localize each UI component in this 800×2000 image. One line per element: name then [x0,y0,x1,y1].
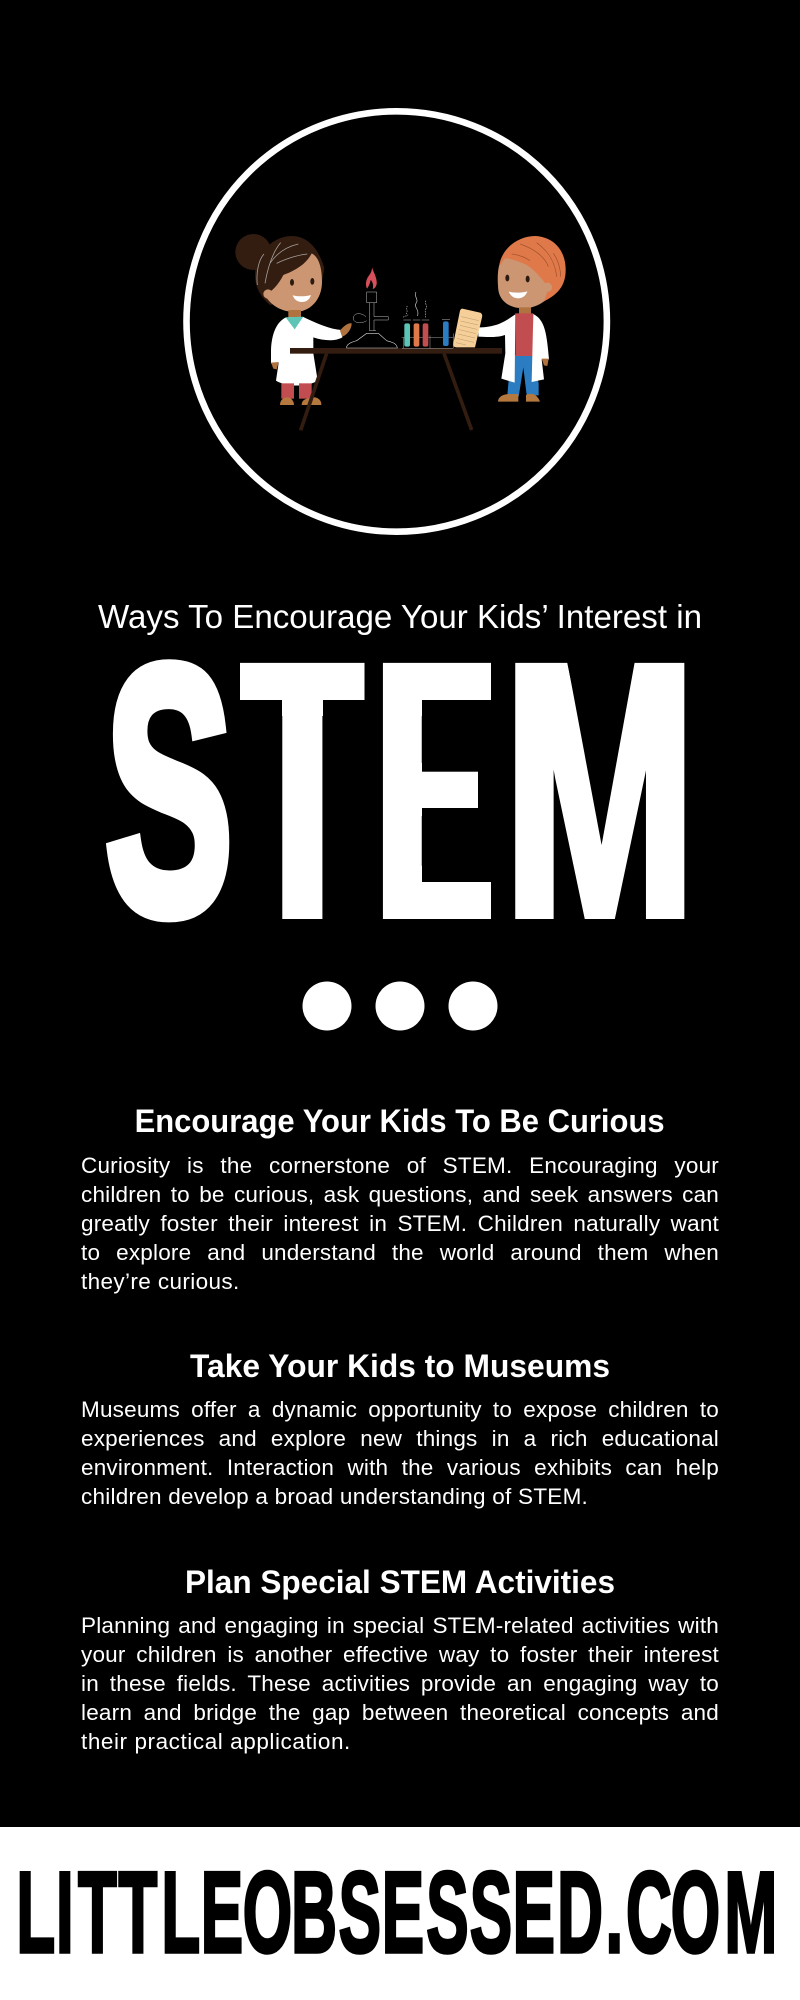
test tubes and rack [402,292,453,349]
paragraph: museums [81,1397,719,1508]
paragraph: activities: your children is another effective way to foster their interest [81,1642,719,1667]
paragraph: activities: their practical application. [81,1729,351,1754]
bunsen burner with flame [347,267,397,348]
table [290,348,502,430]
footer website text: LITTLEOBSESSED.COM [16,1848,777,1977]
paragraph: curious: Curiosity is the cornerstone of STEM. Encouraging your [81,1153,719,1178]
paragraph: curious: to explore and understand the world around them when [81,1240,719,1265]
footer band [0,1827,800,2000]
girl scientist [235,234,352,405]
illustration: kids at lab table [235,234,566,430]
paragraph: curious: children to be curious, ask questions, and seek answers can [81,1182,719,1207]
note paper [453,309,482,347]
main title STEM [105,593,695,988]
paragraph: curious [81,1153,719,1294]
circular badge with scientists illustration [187,111,607,532]
paragraph: activities: learn and bridge the gap between theoretical concepts and [81,1700,719,1725]
subtitle: Ways To Encourage Your Kids’ Interest in [98,598,702,635]
main title STEM: M [504,593,695,987]
main title STEM: T [236,595,369,988]
paragraph: museums: children develop a broad understanding of STEM. [81,1484,588,1508]
boy scientist [478,236,566,402]
paragraph: activities [81,1613,719,1754]
heading: museums: Take Your Kids to Museums [190,1348,610,1384]
paragraph: activities: Planning and engaging in special STEM-related activities with [81,1613,719,1638]
heading: activities: Plan Special STEM Activities [185,1564,615,1600]
paragraph: curious: greatly foster their interest in STEM. Children naturally want [81,1211,719,1236]
paragraph: museums: environment. Interaction with the various exhibits can help [81,1455,719,1480]
main title STEM: S [105,594,233,988]
three dots [302,982,498,1030]
paragraph: museums: experiences and explore new things in a rich educational [81,1426,719,1451]
paragraph: activities: in these fields. These activities provide an engaging way to [81,1671,719,1696]
circle outline [187,111,607,532]
paragraph: curious: they’re curious. [81,1269,240,1294]
heading: curious: Encourage Your Kids To Be Curious [135,1103,665,1139]
paragraph: museums: Museums offer a dynamic opportunity to expose children to [81,1397,719,1422]
main title STEM: E [373,593,514,987]
